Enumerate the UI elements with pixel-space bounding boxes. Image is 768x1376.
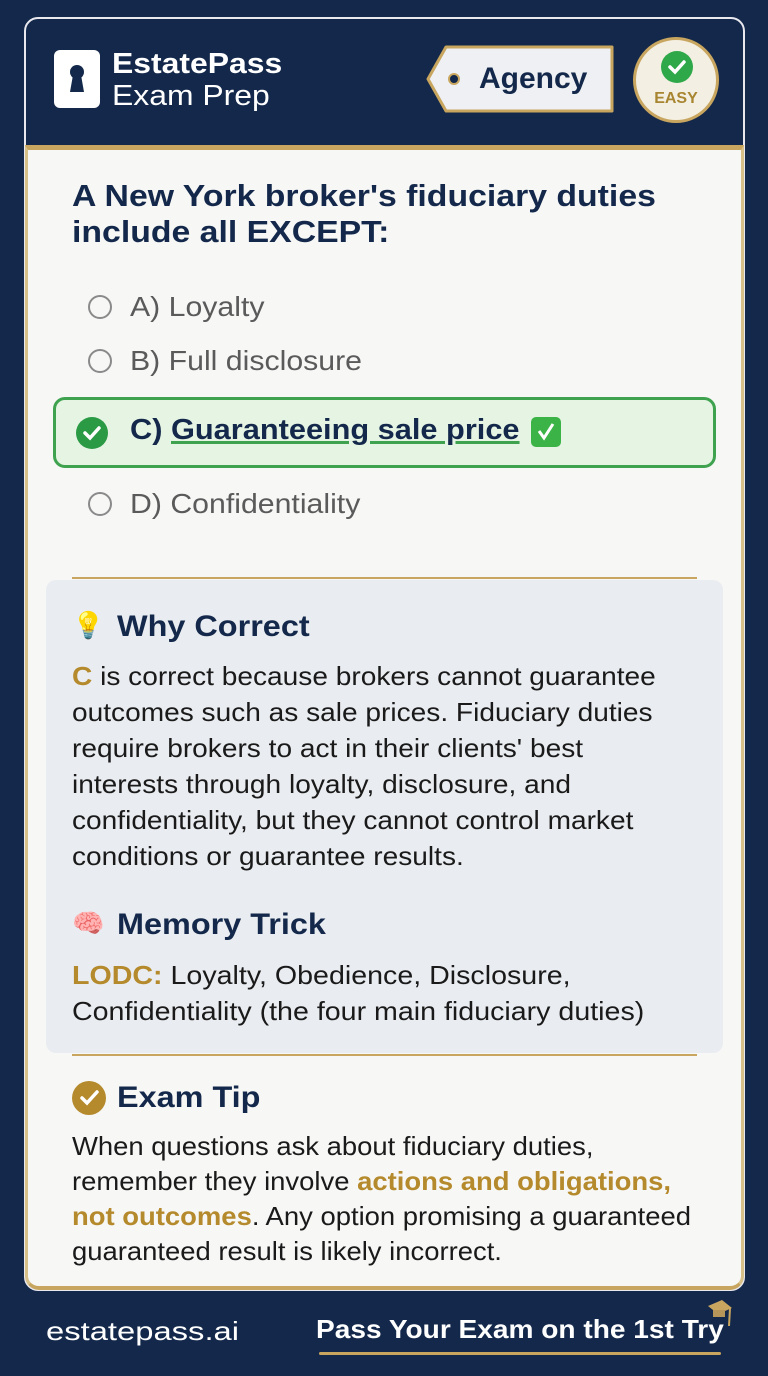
header: logo: Exam Prep	[112, 80, 270, 112]
question: A New York broker's fiduciary duties	[72, 178, 656, 213]
text: memory trick: Confidentiality (the four main fiduciary duties)	[72, 996, 644, 1026]
text: why correct: outcomes such as sale prices. Fiduciary duties	[72, 697, 653, 727]
footer: tagline	[316, 1300, 732, 1355]
icon: grad cap	[708, 1300, 732, 1326]
option B: B) Full disclosure	[130, 345, 362, 376]
text: exam tip: When questions ask about fiduciary duties,	[72, 1131, 593, 1161]
panel: explanation	[46, 580, 723, 1053]
header: logo	[54, 48, 282, 112]
text: why correct: require brokers to act in their clients' best	[72, 733, 583, 763]
text: exam tip: remember they involve actions and obligations,	[72, 1166, 671, 1196]
text: why correct	[72, 661, 656, 871]
footer: tagline: Pass Your Exam on the 1st Try	[316, 1314, 724, 1344]
question: include all EXCEPT:	[72, 214, 389, 249]
icon: check box	[531, 417, 561, 447]
tag: Agency	[426, 46, 614, 112]
content card	[25, 145, 744, 1290]
heading: memory trick: Memory Trick	[117, 908, 326, 941]
tag: Agency: Agency	[479, 62, 587, 95]
question	[72, 178, 656, 249]
option A: A) Loyalty	[130, 291, 265, 322]
text: exam tip: guaranteed result is likely incorrect.	[72, 1236, 502, 1266]
option D: D) Confidentiality	[130, 488, 360, 519]
text: memory trick	[72, 960, 644, 1026]
text: exam tip: not outcomes. Any option promising a guaranteed	[72, 1201, 691, 1231]
footer: url: estatepass.ai	[46, 1316, 239, 1346]
badge: EASY: EASY	[654, 90, 698, 107]
text: exam tip	[72, 1131, 691, 1266]
icon: green check	[661, 51, 693, 83]
icon: check circle	[76, 417, 108, 449]
option C correct: C) Guaranteeing sale price	[130, 414, 520, 446]
text: why correct: confidentiality, but they cannot control market	[72, 805, 633, 835]
text: why correct: conditions or guarantee results.	[72, 841, 464, 871]
heading: exam tip: Exam Tip	[117, 1081, 260, 1114]
badge: EASY	[633, 37, 719, 123]
brand text: EstatePass	[112, 48, 282, 80]
heading: why correct: Why Correct	[117, 610, 310, 643]
text: memory trick: LODC: Loyalty, Obedience, Disclosure,	[72, 960, 571, 990]
text: why correct: interests through loyalty, disclosure, and	[72, 769, 571, 799]
heading: why correct: 💡	[72, 610, 104, 640]
icon: keyhole	[54, 50, 100, 108]
heading: memory trick: 🧠	[72, 908, 104, 938]
option C correct	[53, 397, 716, 468]
text: why correct: C is correct because brokers cannot guarantee	[72, 661, 656, 691]
